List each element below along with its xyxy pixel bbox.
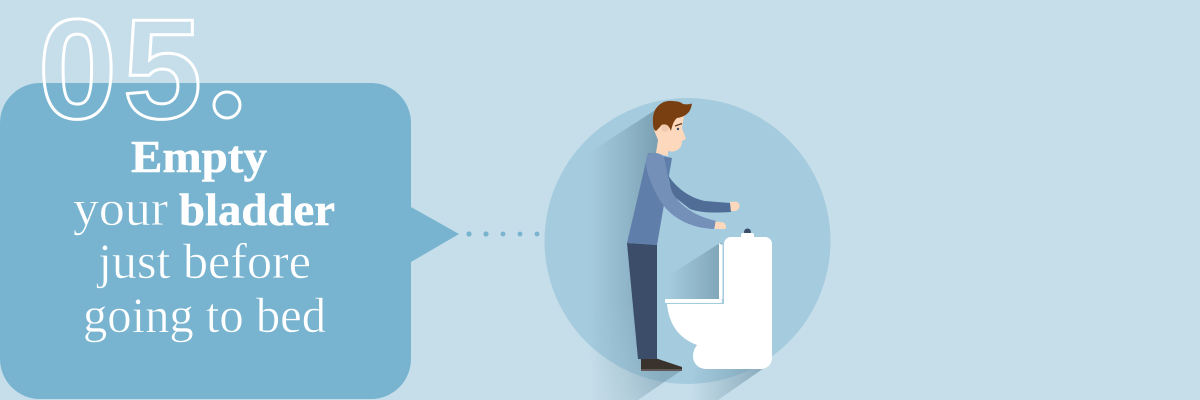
lid <box>719 243 722 299</box>
bowl <box>667 304 725 345</box>
dotted connector <box>466 231 539 237</box>
shoe <box>641 359 682 371</box>
heading text: your <box>73 180 168 236</box>
far hand <box>730 202 740 211</box>
eye and brow <box>675 124 682 130</box>
torso <box>627 153 672 245</box>
hair <box>653 101 692 131</box>
man figure <box>627 101 740 371</box>
heading text <box>73 132 335 343</box>
heading text: just before <box>96 233 311 289</box>
heading text: going to bed <box>83 287 326 343</box>
heading text: Empty <box>131 132 268 182</box>
ear <box>661 124 669 132</box>
neck and face <box>654 116 686 156</box>
near arm <box>646 153 716 229</box>
far arm <box>668 175 731 213</box>
tank and base <box>693 237 772 369</box>
heading text: bladder <box>179 185 335 235</box>
seat <box>665 299 722 303</box>
speech bubble panel <box>0 83 459 399</box>
toilet <box>665 228 772 369</box>
near hand <box>714 222 726 229</box>
long shadows <box>590 107 764 400</box>
illustration circle <box>544 98 830 384</box>
flush button <box>741 228 754 239</box>
trousers <box>627 243 657 360</box>
